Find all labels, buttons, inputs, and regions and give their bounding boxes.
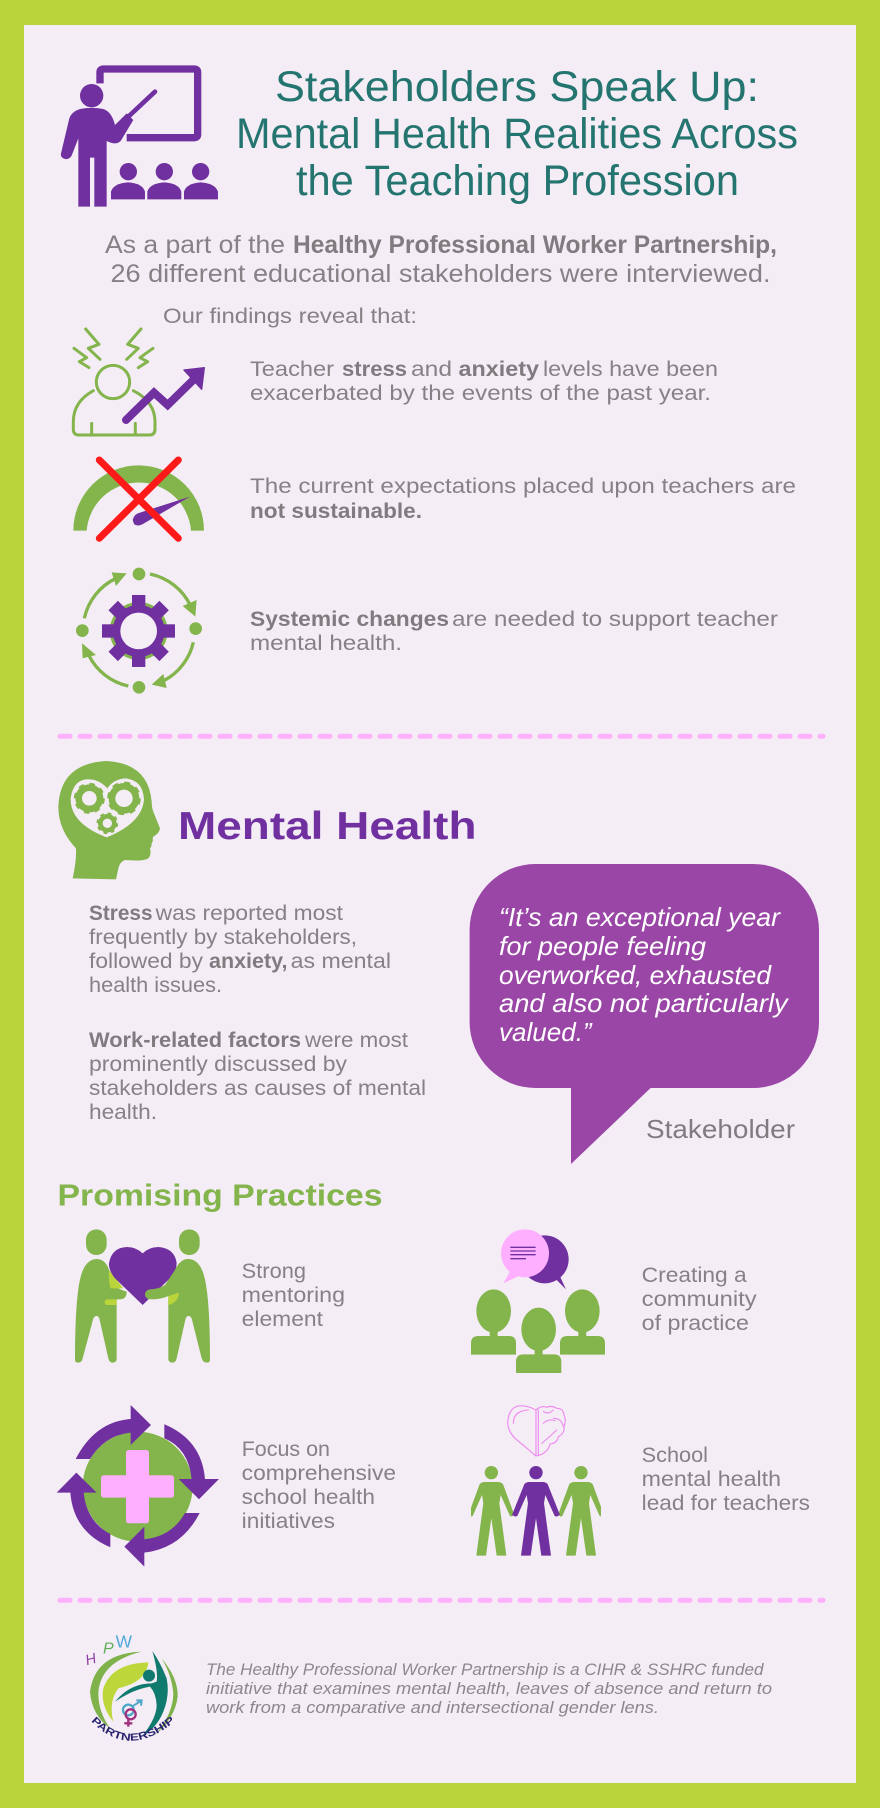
- icon: two people holding a heart: [75, 1229, 210, 1363]
- practice: school health initiatives: school health: [242, 1485, 375, 1509]
- text block: stress and anxiety: anxiety,: [209, 950, 288, 973]
- practice: school health initiatives: Focus on: [242, 1437, 330, 1461]
- practice: mentoring: element: [242, 1307, 323, 1331]
- logo: Healthy Professional Worker Partnership: P: [103, 1641, 114, 1658]
- text block: work-related factors: prominently discussed by: [89, 1053, 348, 1076]
- quote text: valued.”: [499, 1017, 593, 1047]
- intro text: 26 different educational stakeholders were interviewed.: [110, 260, 770, 288]
- practice: mentoring: [242, 1259, 345, 1331]
- text block: stress and anxiety: as mental: [291, 950, 391, 973]
- finding: systemic changes: mental health.: [250, 631, 402, 655]
- quote text: and also not particularly: [499, 988, 790, 1018]
- finding: systemic changes: Systemic changes: [250, 607, 449, 631]
- text block: work-related factors: Work-related factors: [89, 1029, 301, 1052]
- icon: health plus with cycle arrows: [57, 1405, 219, 1567]
- practice: community of practice: [642, 1263, 757, 1335]
- finding: stress and anxiety: Teacher: [250, 357, 334, 381]
- speech bubble: [470, 864, 819, 1164]
- text block: stress and anxiety: frequently by stakeholders,: [89, 926, 357, 949]
- practice: school health initiatives: [242, 1437, 396, 1533]
- callout: stakeholder quote: [470, 864, 819, 1164]
- logo: Healthy Professional Worker Partnership: PARTNERSHIP: [92, 1716, 172, 1741]
- quote attribution: Stakeholder: [646, 1114, 795, 1144]
- logo: Healthy Professional Worker Partnership: W: [116, 1632, 133, 1652]
- finding: stress and anxiety: anxiety: [458, 357, 539, 381]
- logo: Healthy Professional Worker Partnership: H: [84, 1651, 99, 1669]
- logo: Healthy Professional Worker Partnership: [84, 1632, 178, 1741]
- findings lead-in: Our findings reveal that:: [163, 304, 417, 328]
- finding: stress and anxiety: stress: [342, 357, 407, 381]
- practice: school mental health lead: lead for teachers: [642, 1491, 810, 1515]
- footer text: work from a comparative and intersectional gender lens.: [206, 1699, 659, 1717]
- text block: stress and anxiety: Stress: [89, 902, 152, 925]
- text block: stress and anxiety: health issues.: [89, 974, 222, 997]
- practice: mentoring: Strong: [242, 1259, 306, 1283]
- icon: heart-brain above three linked people: [467, 1406, 605, 1556]
- icon: teacher at board with audience: [61, 69, 218, 207]
- quote text: “It’s an exceptional year: [499, 902, 781, 932]
- icon: gauge crossed out: [73, 460, 204, 538]
- heading: Promising Practices: Promising Practices: [58, 1178, 382, 1213]
- title: the Teaching Profession: [296, 157, 739, 205]
- heading: Mental Health: Mental Health: [178, 805, 476, 848]
- finding: stress and anxiety: exacerbated by the events of the past year.: [250, 381, 711, 405]
- footer text: [206, 1661, 772, 1717]
- finding: systemic changes: are needed to support teacher: [452, 607, 778, 631]
- finding: expectations not sustainable: not sustainable.: [250, 499, 422, 523]
- practice: mentoring: mentoring: [242, 1283, 345, 1307]
- practice: school mental health lead: School: [642, 1443, 708, 1467]
- finding: expectations not sustainable: [250, 474, 796, 523]
- text block: stress and anxiety: [89, 902, 391, 997]
- footer text: The Healthy Professional Worker Partnership is a CIHR & SSHRC funded: [206, 1661, 764, 1679]
- text block: stress and anxiety: followed by: [89, 950, 204, 973]
- practice: community of practice: community: [642, 1287, 757, 1311]
- icon: stressed person with rising arrow: [73, 329, 204, 435]
- finding: stress and anxiety: [250, 357, 718, 405]
- title: Stakeholders Speak Up:: [275, 63, 759, 111]
- quote text: overworked, exhausted: [499, 960, 773, 990]
- title: Mental Health Realities Across: [236, 110, 798, 158]
- practice: school health initiatives: comprehensive: [242, 1461, 396, 1485]
- text block: work-related factors: [89, 1029, 426, 1124]
- intro text: As a part of the: [105, 231, 285, 259]
- text block: stress and anxiety: was reported most: [155, 902, 343, 925]
- finding: systemic changes: [250, 607, 778, 655]
- practice: community of practice: of practice: [642, 1311, 749, 1335]
- text block: work-related factors: were most: [304, 1029, 408, 1052]
- intro text: [105, 231, 777, 288]
- intro text: Healthy Professional Worker Partnership,: [293, 231, 777, 259]
- practice: community of practice: Creating a: [642, 1263, 747, 1287]
- finding: expectations not sustainable: The current expectations placed upon teachers are: [250, 474, 796, 498]
- icon: head with heart and gears: [58, 761, 160, 879]
- quote text: [499, 902, 790, 1047]
- practice: school mental health lead: [642, 1443, 810, 1515]
- icon: gear with cycle arrows: [76, 568, 202, 694]
- text block: work-related factors: stakeholders as causes of mental: [89, 1077, 426, 1100]
- practice: school mental health lead: mental health: [642, 1467, 781, 1491]
- practice: school health initiatives: initiatives: [242, 1509, 335, 1533]
- footer text: initiative that examines mental health, leaves of absence and return to: [206, 1680, 772, 1698]
- icon: chat bubbles over three people: [471, 1229, 605, 1373]
- title: [236, 63, 798, 205]
- quote text: for people feeling: [499, 931, 707, 961]
- finding: stress and anxiety: levels have been: [543, 357, 718, 381]
- finding: stress and anxiety: and: [411, 357, 452, 381]
- text block: work-related factors: health.: [89, 1101, 157, 1124]
